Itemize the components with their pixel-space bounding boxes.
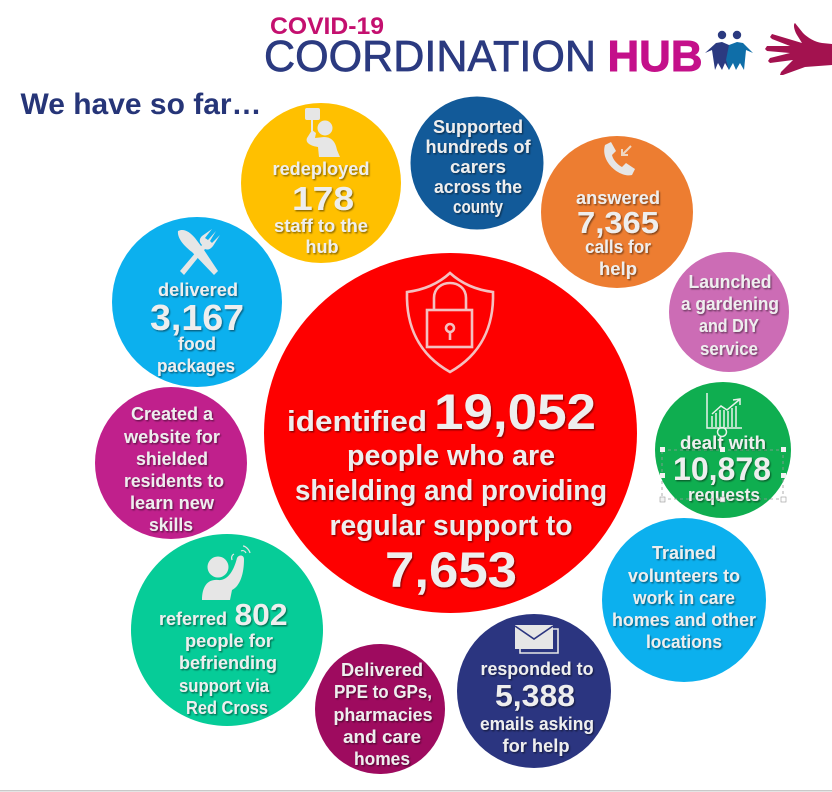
panel: gardening and DIY: Launched (688, 271, 772, 292)
panel: gardening and DIY (669, 252, 789, 372)
panel: trained volunteers: volunteers to (628, 565, 740, 586)
panel: carers: county (453, 197, 503, 217)
icon: growth chart (707, 393, 742, 436)
panel: food packages (112, 217, 282, 387)
panel: befriending referrals: referred (159, 608, 227, 629)
panel: befriending referrals: 802 (234, 597, 288, 632)
panel: calls answered: 7,365 (577, 205, 659, 240)
bottom rule (0, 790, 832, 792)
panel: carers: across the (434, 177, 522, 197)
panel: PPE: Delivered (341, 660, 423, 680)
selection handles (660, 447, 786, 502)
panel: food packages: packages (157, 355, 235, 376)
panel: website for shielded residents: Created a (131, 404, 214, 424)
icon: person waving (202, 546, 250, 600)
panel: calls answered (541, 136, 693, 288)
panel: food packages: 3,167 (150, 297, 244, 338)
panel: gardening and DIY: and DIY (699, 315, 760, 336)
panel: food packages: food (178, 333, 216, 354)
panel: food packages: delivered (158, 279, 238, 300)
panel: PPE: and care (343, 727, 421, 747)
logo: COVID-19 Coordination Hub: HUB (608, 32, 702, 81)
logo: COVID-19 Coordination Hub (264, 13, 832, 81)
panel: befriending referrals (131, 534, 323, 726)
panel: trained volunteers: homes and other (612, 609, 756, 630)
panel: shielding (main): 7,653 (385, 542, 517, 598)
icon: envelope (515, 625, 558, 653)
panel: PPE: PPE to GPs, (334, 682, 432, 702)
panel: redeployed staff (241, 103, 401, 263)
panel: redeployed staff: staff to the (274, 215, 368, 236)
logo: COVID-19 Coordination Hub: COORDINATION (264, 32, 596, 81)
panel: calls answered: help (599, 258, 637, 279)
logo: COVID-19 Coordination Hub: COVID-19 (270, 13, 384, 40)
panel: website for shielded residents: learn new (130, 493, 215, 513)
panel: carers: hundreds of (426, 137, 532, 157)
panel: calls answered: answered (576, 187, 660, 208)
panel: befriending referrals: Red Cross (186, 697, 268, 718)
panel: carers: carers (450, 157, 506, 177)
panel: PPE: homes (354, 749, 410, 769)
panel: emails: emails asking (480, 713, 594, 734)
panel: shielding (main): shielding and providing (295, 475, 607, 507)
icon: shield and padlock (407, 273, 493, 372)
panel: website for shielded residents (95, 387, 247, 539)
panel: shielding (main): people who are (347, 440, 555, 472)
icon: people (705, 31, 753, 70)
panel: shielding (main): identified (287, 406, 427, 438)
panel: requests dealt with (655, 382, 791, 518)
panel: redeployed staff: hub (306, 236, 338, 257)
panel: website for shielded residents: skills (149, 515, 193, 535)
panel: calls answered: calls for (585, 236, 651, 257)
panel: shielding (main): 19,052 (434, 384, 596, 440)
panel: trained volunteers: work in care (632, 587, 735, 608)
icon: phone (604, 142, 635, 175)
panel: redeployed staff: 178 (292, 180, 354, 217)
panel: carers (410, 96, 544, 230)
panel: befriending referrals: people for (185, 630, 273, 651)
panel: trained volunteers (602, 518, 766, 682)
panel: shielding (main) (264, 253, 637, 613)
panel: emails: for help (502, 735, 570, 756)
panel: PPE (315, 644, 445, 774)
panel: emails: 5,388 (495, 678, 575, 713)
panel: requests dealt with: dealt with (680, 432, 766, 453)
panel: PPE: pharmacies (334, 705, 432, 725)
panel: trained volunteers: locations (646, 631, 722, 652)
panel: emails (457, 614, 611, 768)
panel: website for shielded residents: residents to (124, 471, 224, 491)
icon: fork and knife (178, 229, 220, 275)
panel: shielding (main): regular support to (330, 510, 572, 542)
panel: requests dealt with: requests (688, 484, 760, 505)
panel: trained volunteers: Trained (652, 542, 716, 563)
panel: gardening and DIY: a gardening (681, 293, 779, 314)
icon: hand (765, 23, 832, 75)
panel: carers: Supported (433, 117, 523, 137)
panel: befriending referrals: befriending (179, 652, 277, 673)
panel: website for shielded residents: website for (123, 427, 220, 447)
icon: person with speech sign (305, 108, 340, 157)
heading: We have so far… (20, 88, 262, 121)
panel: gardening and DIY: service (700, 338, 758, 359)
panel: emails: responded to (480, 658, 594, 679)
panel: befriending referrals: support via (179, 675, 270, 696)
panel: website for shielded residents: shielded (136, 449, 208, 469)
panel: redeployed staff: redeployed (272, 158, 370, 179)
panel: requests dealt with: 10,878 (673, 451, 771, 487)
